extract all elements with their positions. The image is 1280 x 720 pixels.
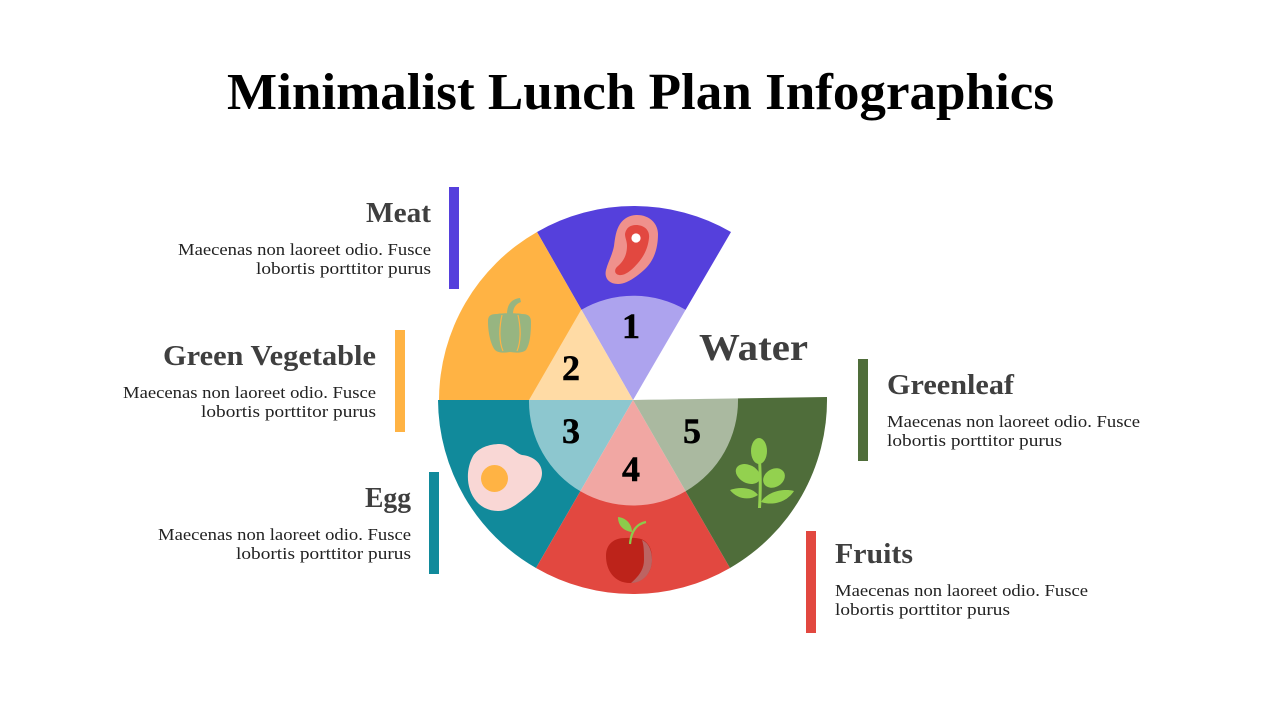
panel: meat (178, 187, 459, 289)
panel: egg (158, 472, 439, 574)
icon: fried egg (468, 444, 542, 511)
description: Maecenas non laoreet odio. Fusce (835, 581, 1088, 600)
accent bar (449, 187, 459, 289)
description: Maecenas non laoreet odio. Fusce (887, 412, 1140, 431)
segment: greenleaf (633, 397, 827, 568)
heading: Greenleaf (887, 369, 1014, 401)
number 2: 2 (562, 348, 580, 388)
description: lobortis porttitor purus (887, 431, 1062, 450)
description (887, 412, 1140, 450)
description (178, 240, 431, 278)
panel: green vegetable (123, 330, 405, 432)
description: lobortis porttitor purus (236, 544, 411, 563)
number 1: 1 (622, 306, 640, 346)
description: lobortis porttitor purus (201, 402, 376, 421)
segment: fruits (536, 400, 730, 594)
inner overlay hub (529, 296, 738, 506)
accent bar (395, 330, 405, 432)
number 5: 5 (683, 411, 701, 451)
description (835, 581, 1088, 619)
heading: Fruits (835, 538, 913, 570)
panel: greenleaf (858, 359, 1140, 461)
segment: meat (537, 206, 731, 400)
description: lobortis porttitor purus (256, 259, 431, 278)
description: Maecenas non laoreet odio. Fusce (178, 240, 431, 259)
number 3: 3 (562, 411, 580, 451)
accent bar (858, 359, 868, 461)
title: Minimalist Lunch Plan Infographics (227, 64, 1054, 121)
icon: meat (606, 215, 658, 284)
description: Maecenas non laoreet odio. Fusce (123, 383, 376, 402)
description: Maecenas non laoreet odio. Fusce (158, 525, 411, 544)
icon: apple (606, 517, 652, 583)
segment: egg (438, 400, 633, 568)
panel: fruits (806, 531, 1088, 633)
heading: Egg (365, 482, 411, 514)
segment: green vegetable (439, 232, 633, 400)
heading: Meat (366, 197, 431, 229)
accent bar (429, 472, 439, 574)
pie chart (438, 206, 827, 594)
heading: Green Vegetable (163, 340, 376, 372)
accent bar (806, 531, 816, 633)
label: water: Water (699, 327, 808, 369)
description (158, 525, 411, 563)
number 4: 4 (622, 449, 640, 489)
description (123, 383, 376, 421)
icon: bell pepper (488, 298, 531, 353)
description: lobortis porttitor purus (835, 600, 1010, 619)
icon: leaf sprig (730, 438, 794, 508)
